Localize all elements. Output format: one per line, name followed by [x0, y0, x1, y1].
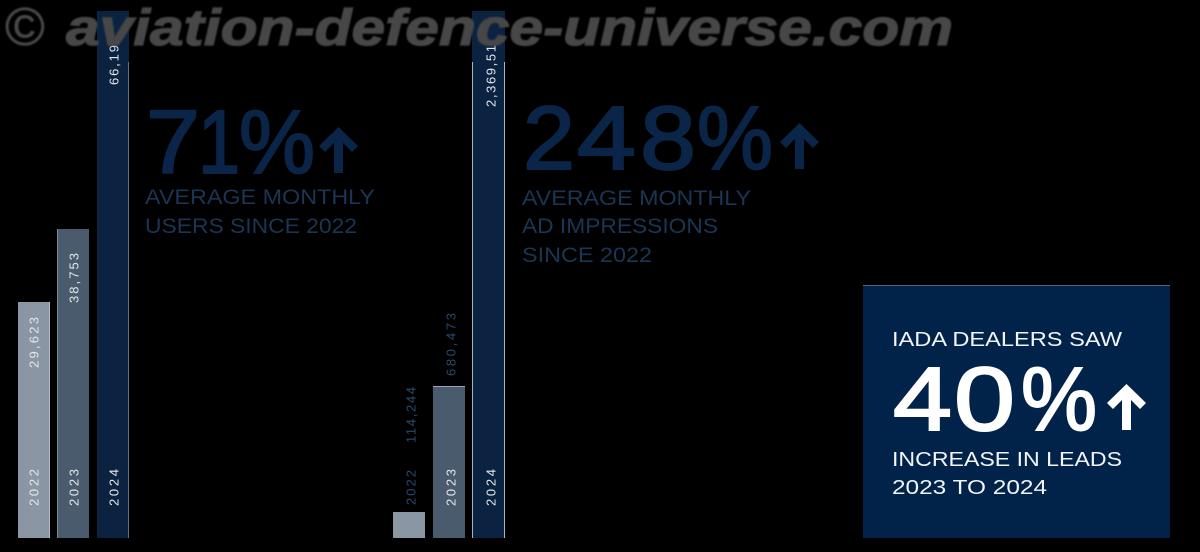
panel intro text: IADA DEALERS SAW: [892, 328, 1123, 351]
bar 2024 users: 66,19: [106, 45, 122, 85]
bar 2023 impressions: 2023: [444, 469, 458, 506]
caption: ad impressions: [522, 187, 751, 267]
bar 2022 users: [18, 302, 50, 538]
caption: ad impressions: AVERAGE MONTHLY: [522, 187, 751, 210]
watermark: [5, 0, 953, 57]
figure 71%: [146, 93, 315, 193]
bar 2024 impressions: 2,369,51: [484, 45, 498, 107]
bar 2023 users: [57, 229, 89, 538]
bar 2022 users: 2022: [26, 469, 42, 506]
stat: 248 percent ad impressions: [522, 89, 819, 267]
chart: average monthly ad impressions: [393, 11, 505, 538]
icon: up arrow: [780, 123, 819, 169]
panel caption: 2023 TO 2024: [892, 476, 1047, 499]
figure 248%: 4: [577, 89, 636, 189]
bar 2024 impressions: [472, 11, 505, 538]
icon: up arrow: [319, 127, 358, 173]
panel: IADA dealer leads: [863, 285, 1170, 538]
chart: average monthly users: [18, 11, 129, 538]
bar 2024 users: [97, 11, 129, 538]
bar 2022 impressions: 114,244: [404, 387, 418, 443]
figure 248%: 8: [640, 89, 696, 189]
figure 40%: 4: [893, 350, 952, 450]
figure 71%: 1: [198, 93, 240, 193]
figure 71%: %: [239, 93, 315, 193]
bar 2023 impressions: [433, 313, 465, 538]
figure 248%: 2: [523, 89, 575, 189]
bar 2023 users: 2023: [66, 469, 82, 506]
caption: ad impressions: SINCE 2022: [522, 244, 652, 267]
bar 2022 users: 29,623: [26, 317, 42, 368]
figure 40%: %: [1021, 350, 1097, 450]
figure 40%: [893, 350, 1097, 450]
panel background: [863, 285, 1170, 538]
bar 2023 users: 38,753: [66, 253, 82, 303]
caption: users: AVERAGE MONTHLY: [145, 186, 375, 209]
figure 248%: %: [697, 89, 773, 189]
figure 248%: [523, 89, 773, 189]
bar 2024 users: 2024: [106, 469, 122, 506]
panel caption: [892, 448, 1122, 499]
bar 2022 impressions: [393, 387, 425, 538]
stat: 71 percent users: [145, 93, 375, 238]
bar 2024 impressions: 2024: [484, 469, 498, 506]
icon: up arrow: [1107, 384, 1146, 430]
panel top edge: [863, 285, 1170, 286]
figure 40%: 0: [954, 350, 1015, 450]
watermark site name: aviation-defence-universe.com: [66, 0, 953, 56]
caption: users: USERS SINCE 2022: [145, 215, 357, 238]
panel caption: INCREASE IN LEADS: [892, 448, 1122, 471]
caption: users: [145, 186, 375, 238]
bar 2022 impressions: 2022: [404, 470, 418, 505]
figure 71%: 7: [146, 93, 200, 193]
bar 2023 impressions: 680,473: [444, 313, 458, 376]
caption: ad impressions: AD IMPRESSIONS: [522, 215, 718, 238]
